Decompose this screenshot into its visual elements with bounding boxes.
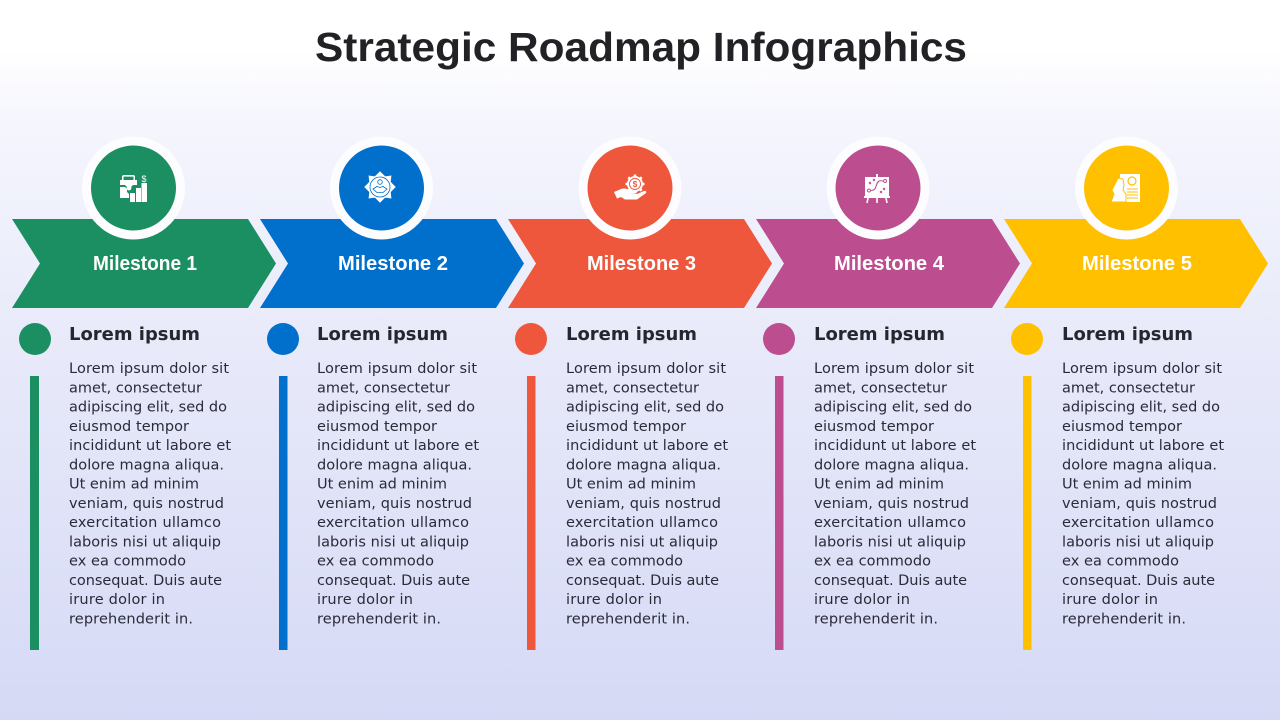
body text: reprehenderit in.	[814, 611, 938, 627]
body text: reprehenderit in.	[566, 611, 690, 627]
label: milestone 5: Milestone 5	[1082, 253, 1192, 275]
body text: exercitation ullamco	[69, 515, 221, 531]
icon: hand holding dollar gear: $	[633, 180, 638, 189]
body text: ex ea commodo	[69, 554, 186, 570]
label: milestone 4: Milestone 4	[834, 253, 945, 275]
body text: laboris nisi ut aliquip	[566, 534, 718, 550]
badge: milestone 3	[578, 136, 682, 240]
bullet dot	[763, 323, 795, 355]
body text: laboris nisi ut aliquip	[1062, 534, 1214, 550]
arrow: milestone 1	[12, 219, 276, 308]
icon: briefcase and growth bars	[120, 174, 147, 202]
body text: amet, consectetur	[69, 380, 202, 396]
body text: amet, consectetur	[1062, 380, 1195, 396]
body text: dolore magna aliqua.	[69, 457, 224, 473]
body text: veniam, quis nostrud	[1062, 496, 1217, 512]
body text: Ut enim ad minim	[317, 476, 447, 492]
heading: Lorem ipsum	[566, 324, 697, 345]
body text: consequat. Duis aute	[317, 573, 470, 589]
body text: Lorem ipsum dolor sit	[69, 361, 229, 377]
body text: irure dolor in	[814, 592, 910, 608]
badge: milestone 5	[1075, 136, 1178, 240]
panel: milestone 1	[12, 136, 276, 650]
body text: Lorem ipsum dolor sit	[814, 361, 974, 377]
body text: reprehenderit in.	[69, 611, 193, 627]
body text: adipiscing elit, sed do	[1062, 400, 1220, 416]
body text: reprehenderit in.	[1062, 611, 1186, 627]
icon: gear with handshake	[366, 173, 394, 201]
body text: irure dolor in	[566, 592, 662, 608]
body text: veniam, quis nostrud	[566, 496, 721, 512]
badge: milestone 2	[330, 136, 433, 240]
body text: Lorem ipsum dolor sit	[317, 361, 477, 377]
body text: ex ea commodo	[566, 554, 683, 570]
vertical bar	[775, 376, 784, 650]
label: milestone 1: Milestone 1	[93, 253, 197, 275]
vertical bar	[527, 376, 536, 650]
body text: Ut enim ad minim	[814, 476, 944, 492]
body text	[566, 361, 728, 627]
bullet dot	[1011, 323, 1043, 355]
body text: exercitation ullamco	[317, 515, 469, 531]
panel: milestone 3	[508, 136, 772, 650]
body text: incididunt ut labore et	[69, 438, 231, 454]
label: milestone 2: Milestone 2	[338, 253, 448, 275]
heading: Lorem ipsum	[69, 324, 200, 345]
body text: consequat. Duis aute	[814, 573, 967, 589]
body text: veniam, quis nostrud	[317, 496, 472, 512]
body text: incididunt ut labore et	[814, 438, 976, 454]
badge: milestone 4	[826, 136, 930, 240]
body text: veniam, quis nostrud	[69, 496, 224, 512]
body text: laboris nisi ut aliquip	[317, 534, 469, 550]
arrow: milestone 2	[260, 219, 524, 308]
body text: laboris nisi ut aliquip	[814, 534, 966, 550]
bullet dot	[515, 323, 547, 355]
bullet dot	[19, 323, 51, 355]
vertical bar	[30, 376, 39, 650]
body text: ex ea commodo	[1062, 554, 1179, 570]
heading: Lorem ipsum	[1062, 324, 1193, 345]
body text: Lorem ipsum dolor sit	[1062, 361, 1222, 377]
vertical bar	[279, 376, 288, 650]
icon: briefcase and growth bars: $	[141, 174, 147, 184]
arrow: milestone 5	[1004, 219, 1268, 308]
body text: exercitation ullamco	[1062, 515, 1214, 531]
arrow: milestone 4	[756, 219, 1020, 308]
body text: amet, consectetur	[566, 380, 699, 396]
body text: Ut enim ad minim	[69, 476, 199, 492]
body text	[1062, 361, 1224, 627]
body text: exercitation ullamco	[814, 515, 966, 531]
body text: adipiscing elit, sed do	[814, 400, 972, 416]
arrow: milestone 3	[508, 219, 772, 308]
body text: adipiscing elit, sed do	[317, 400, 475, 416]
body text: ex ea commodo	[317, 554, 434, 570]
body text: amet, consectetur	[317, 380, 450, 396]
heading: Lorem ipsum	[814, 324, 945, 345]
body text: dolore magna aliqua.	[814, 457, 969, 473]
body text: adipiscing elit, sed do	[69, 400, 227, 416]
body text: adipiscing elit, sed do	[566, 400, 724, 416]
body text: irure dolor in	[69, 592, 165, 608]
body text: eiusmod tempor	[566, 419, 686, 435]
body text: eiusmod tempor	[1062, 419, 1182, 435]
body text: reprehenderit in.	[317, 611, 441, 627]
body text: Ut enim ad minim	[566, 476, 696, 492]
body text: dolore magna aliqua.	[317, 457, 472, 473]
body text: dolore magna aliqua.	[1062, 457, 1217, 473]
body text: laboris nisi ut aliquip	[69, 534, 221, 550]
label: milestone 3: Milestone 3	[587, 253, 696, 275]
body text: irure dolor in	[317, 592, 413, 608]
icon: strategy board	[864, 174, 890, 203]
body text: irure dolor in	[1062, 592, 1158, 608]
body text: eiusmod tempor	[69, 419, 189, 435]
body text: Ut enim ad minim	[1062, 476, 1192, 492]
icon: hand holding dollar gear	[614, 174, 646, 200]
body text: incididunt ut labore et	[317, 438, 479, 454]
badge: milestone 1	[82, 136, 185, 240]
body text	[317, 361, 479, 627]
body text: eiusmod tempor	[814, 419, 934, 435]
vertical bar	[1023, 376, 1032, 650]
body text: consequat. Duis aute	[566, 573, 719, 589]
body text: amet, consectetur	[814, 380, 947, 396]
body text: incididunt ut labore et	[566, 438, 728, 454]
body text: exercitation ullamco	[566, 515, 718, 531]
heading: Lorem ipsum	[317, 324, 448, 345]
panel: milestone 2	[260, 136, 524, 650]
title: Strategic Roadmap Infographics	[315, 24, 967, 70]
body text: consequat. Duis aute	[1062, 573, 1215, 589]
body text: eiusmod tempor	[317, 419, 437, 435]
body text: veniam, quis nostrud	[814, 496, 969, 512]
body text	[69, 361, 231, 627]
body text: incididunt ut labore et	[1062, 438, 1224, 454]
body text: dolore magna aliqua.	[566, 457, 721, 473]
panel: milestone 4	[756, 136, 1020, 650]
body text: ex ea commodo	[814, 554, 931, 570]
icon: hand with financial document	[1111, 174, 1140, 202]
bullet dot	[267, 323, 299, 355]
panel: milestone 5	[1004, 136, 1268, 650]
body text: Lorem ipsum dolor sit	[566, 361, 726, 377]
body text: consequat. Duis aute	[69, 573, 222, 589]
body text	[814, 361, 976, 627]
